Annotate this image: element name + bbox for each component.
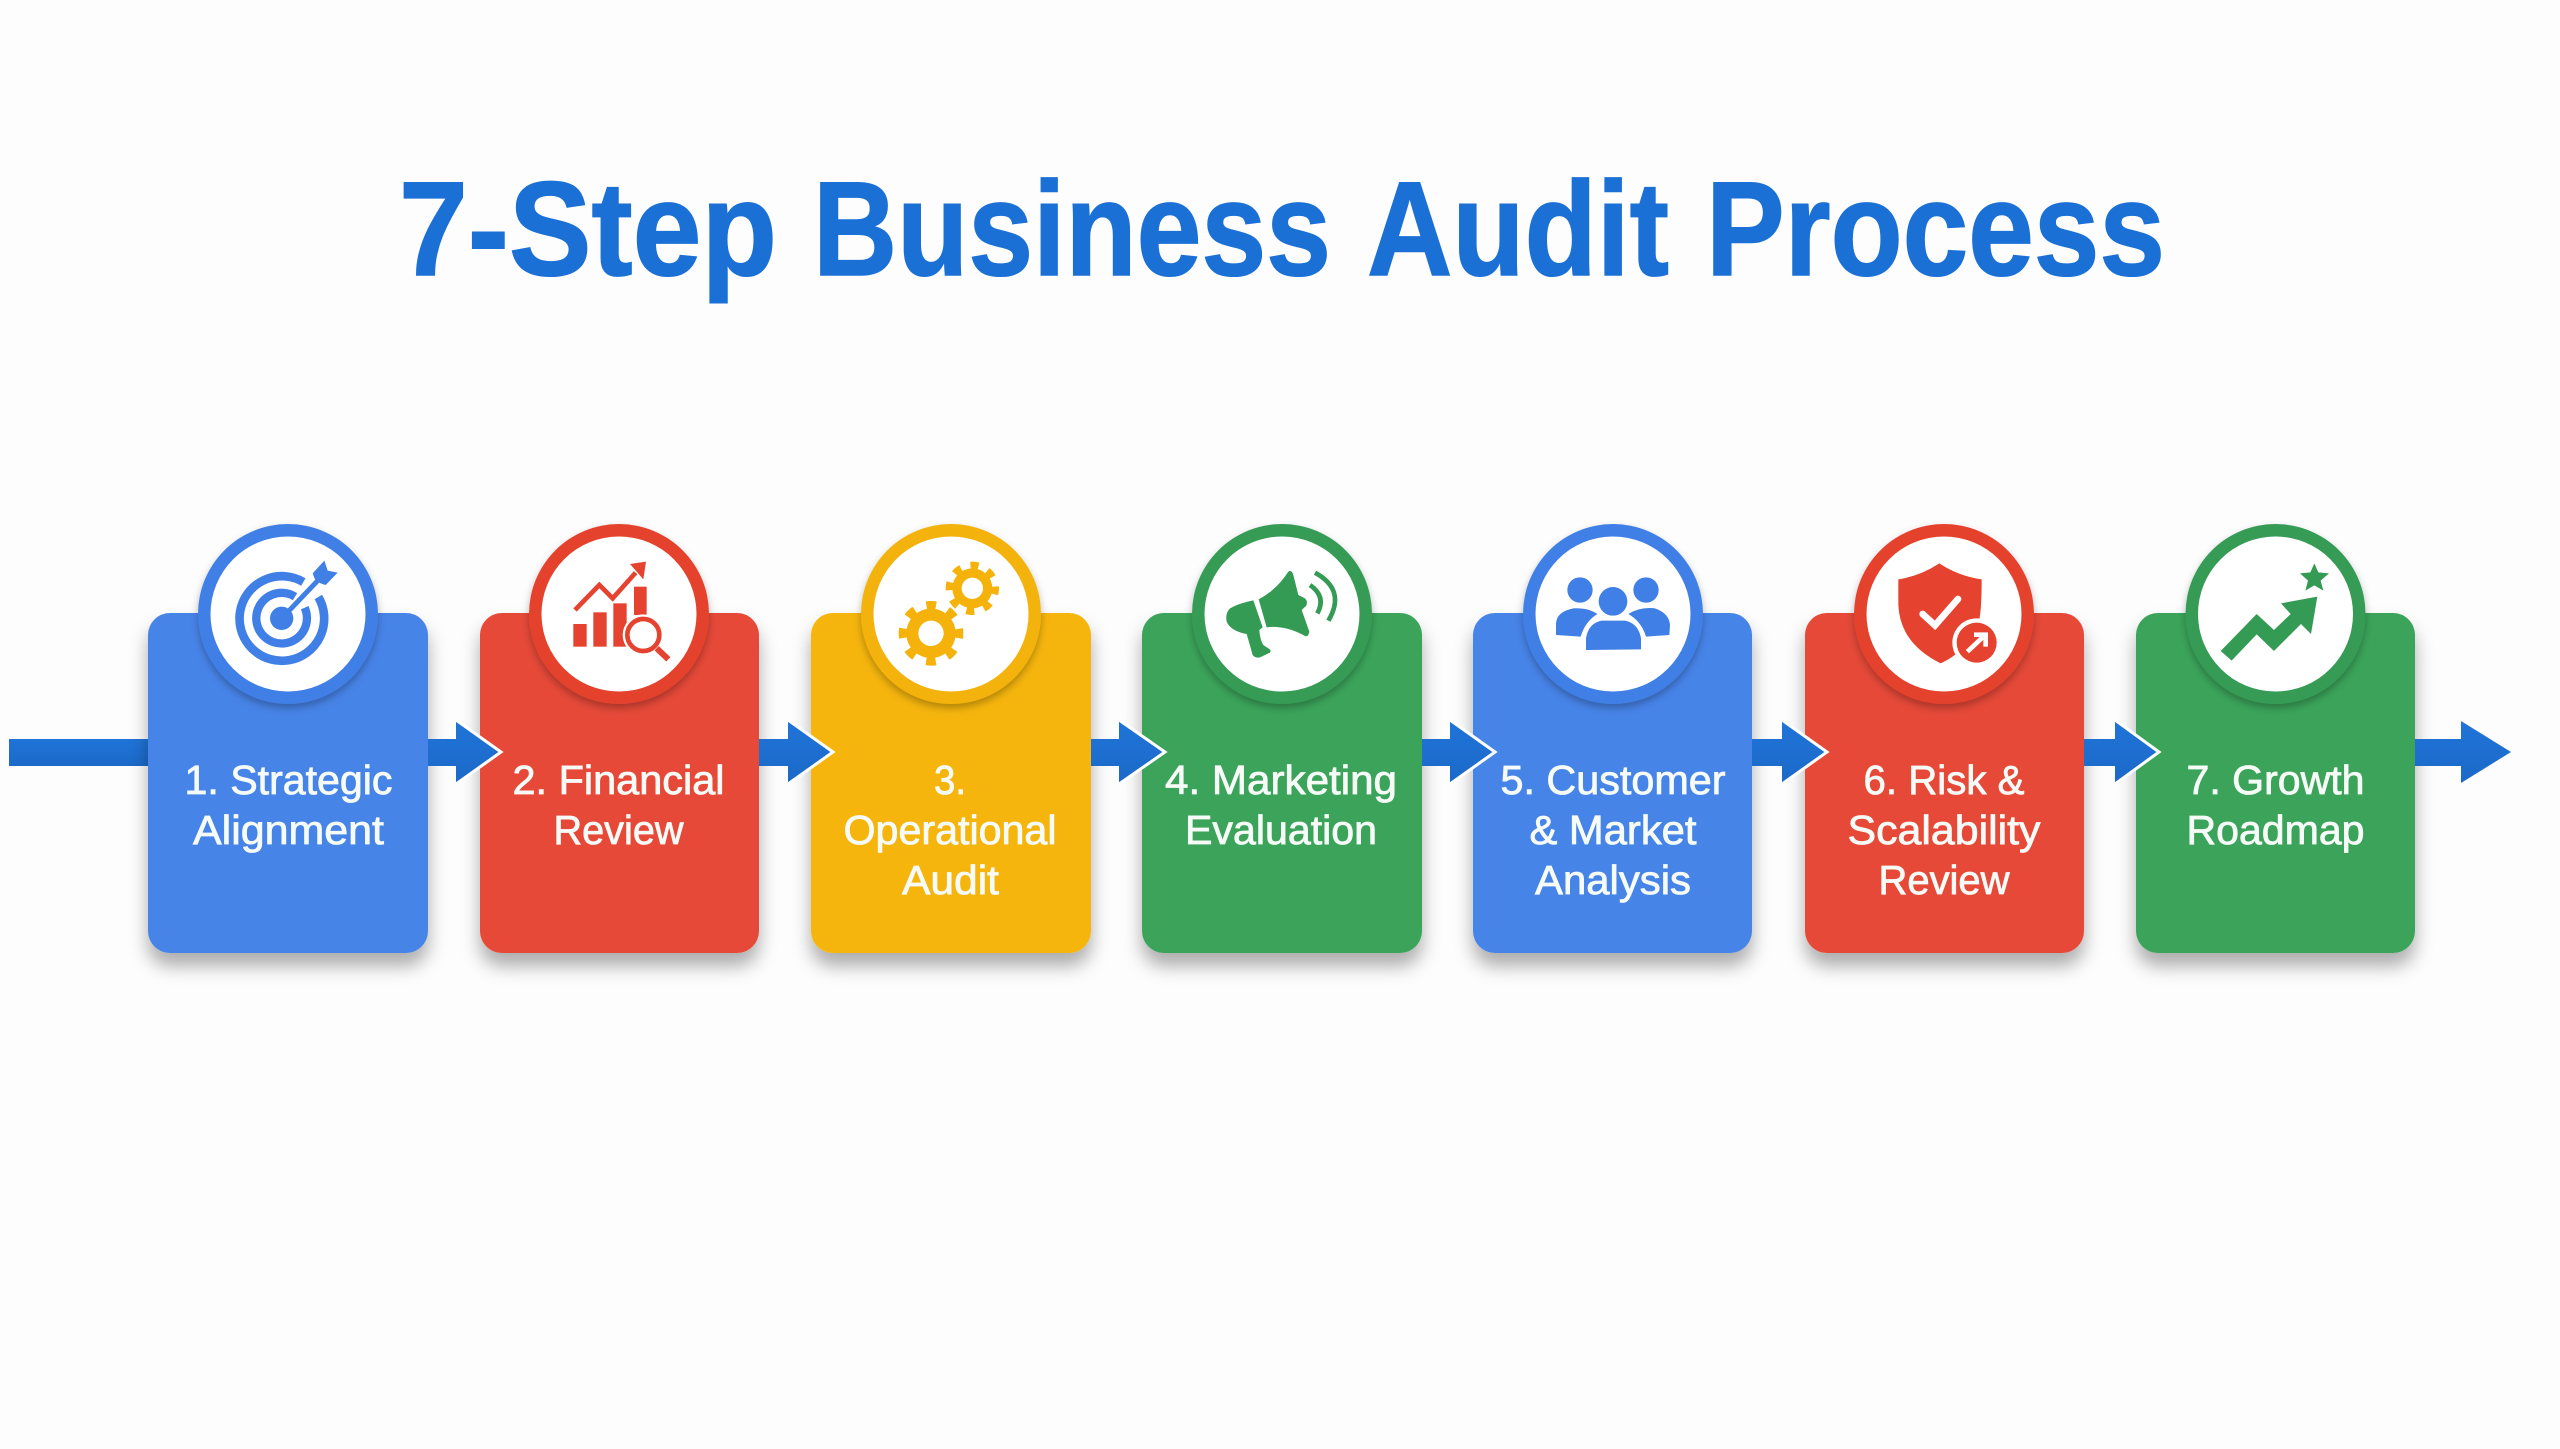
card 7 [2136, 613, 2415, 953]
label 5: & Market [1530, 807, 1697, 853]
arrow: step 6 to 7 [2084, 720, 2159, 784]
label 5: 5. Customer [1500, 757, 1726, 803]
card 6 [1805, 613, 2084, 953]
disc 2 [542, 536, 696, 692]
label 4: Evaluation [1185, 807, 1377, 853]
label 3: Operational [844, 807, 1056, 853]
label 2 [512, 757, 724, 853]
panel: step 3 operational audit [811, 524, 1091, 953]
label 2: 2. Financial [512, 757, 724, 803]
label 2: Review [554, 807, 684, 853]
card 1 [148, 613, 428, 953]
panel: step 7 growth roadmap [2136, 524, 2415, 953]
card 2 [480, 613, 759, 953]
label 6: Review [1878, 857, 2010, 903]
label 3: Audit [902, 857, 1000, 903]
title: 7-Step [399, 155, 777, 304]
arrow: step 5 to 6 [1752, 720, 1827, 784]
disc 6 [1866, 536, 2022, 692]
ring 6 [1854, 524, 2034, 704]
card 3 [811, 613, 1091, 953]
arrow: step 4 to 5 [1422, 720, 1495, 784]
label 1 [184, 757, 392, 853]
icon: chart with magnifier [573, 562, 668, 659]
disc 1 [210, 536, 366, 692]
ring 1 [198, 524, 378, 704]
icon: people [1556, 577, 1670, 650]
arrow: exit [2415, 721, 2511, 783]
label 4: 4. Marketing [1165, 757, 1397, 803]
panel: step 2 financial review [480, 524, 759, 953]
arrow: step 3 to 4 [1091, 720, 1165, 784]
panel: step 5 customer and market analysis [1473, 524, 1752, 953]
panel: step 4 marketing evaluation [1142, 524, 1422, 953]
arrow: step 1 to 2 [428, 720, 501, 784]
disc 5 [1536, 536, 1690, 692]
card 5 [1473, 613, 1752, 953]
label 7: Roadmap [2186, 807, 2364, 853]
label 5: Analysis [1535, 857, 1691, 903]
title: Business [813, 155, 1331, 304]
arrow: step 2 to 3 [759, 720, 833, 784]
label 7 [2186, 757, 2364, 853]
arrow: entry line [9, 739, 149, 766]
icon: target with arrow [240, 561, 338, 661]
disc 7 [2198, 536, 2353, 692]
ring 4 [1192, 524, 1372, 704]
icon: megaphone [1226, 571, 1335, 658]
label 1: 1. Strategic [184, 757, 392, 803]
ring 2 [529, 524, 709, 704]
label 3: 3. [934, 757, 966, 803]
icon: gears [904, 566, 995, 661]
label 6 [1848, 757, 2041, 903]
panel: step 6 risk and scalability review [1805, 524, 2084, 953]
disc 4 [1204, 536, 1360, 692]
label 4 [1165, 757, 1397, 853]
ring 5 [1523, 524, 1703, 704]
card 4 [1142, 613, 1422, 953]
title: Process [1706, 155, 2165, 304]
label 3 [844, 757, 1056, 903]
icon: shield with check [1898, 563, 2001, 667]
icon: growth arrow with star [2221, 563, 2329, 661]
ring 7 [2186, 524, 2366, 704]
label 5 [1500, 757, 1726, 903]
title [399, 155, 2165, 304]
label 7: 7. Growth [2186, 757, 2364, 803]
panel: step 1 strategic alignment [148, 524, 428, 953]
ring 3 [861, 524, 1041, 704]
label 1: Alignment [193, 807, 385, 853]
label 6: Scalability [1848, 807, 2041, 853]
disc 3 [874, 536, 1028, 692]
label 6: 6. Risk & [1864, 757, 2024, 803]
title: Audit [1367, 155, 1669, 304]
